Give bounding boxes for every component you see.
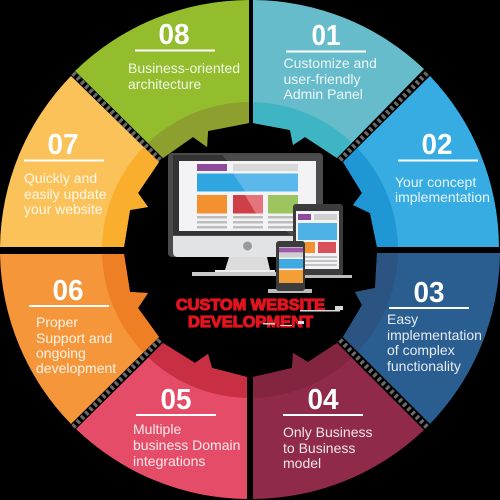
icon: desktop monitor — [168, 153, 323, 276]
title — [176, 297, 325, 331]
icon: responsive devices — [168, 153, 352, 293]
panel: segment 07: your website — [24, 201, 103, 217]
panel: segment 02 — [343, 76, 499, 247]
title: CUSTOM WEBSITE — [176, 297, 325, 314]
panel: segment 08: 08 — [158, 19, 190, 51]
panel: segment 05: integrations — [133, 453, 205, 469]
title highlight marks — [263, 306, 343, 326]
panel: segment 04: 04 — [308, 384, 338, 416]
panel: segment 01: 01 — [312, 20, 340, 52]
panel: segment 05: 05 — [160, 384, 192, 416]
panel: segment 02: implementation — [395, 189, 490, 205]
panel: segment 06 — [0, 254, 159, 424]
panel: segment 05 — [76, 343, 247, 499]
panel: segment 03: of complex — [387, 342, 455, 358]
panel: segment 05: business Domain — [133, 437, 240, 453]
panel: segment 07: 07 — [48, 129, 78, 161]
panel: segment 04: Only Business — [283, 424, 372, 440]
panel: segment 06: ongoing — [36, 345, 86, 361]
panel: segment 08 — [75, 0, 249, 158]
panel: segment 06: 06 — [52, 275, 84, 307]
panel: segment 06: Proper — [36, 314, 78, 330]
panel: segment 02: 02 — [422, 129, 452, 161]
panel: segment 06: development — [36, 360, 116, 376]
panel: segment 04: to Business — [283, 440, 355, 456]
panel: segment 06: Support and — [36, 330, 112, 346]
panel: segment 04: model — [283, 455, 321, 471]
panel: segment 01: Admin Panel — [284, 86, 363, 102]
panel: segment 04 — [253, 343, 424, 499]
panel: segment 08: architecture — [128, 76, 201, 92]
panel: segment 03 — [343, 253, 500, 424]
panel: segment 03: Easy — [387, 311, 418, 327]
panel: segment 02: Your concept — [395, 174, 476, 190]
panel: segment 07 — [0, 76, 159, 247]
panel: segment 01: Customize and — [284, 55, 377, 71]
icon: phone — [268, 241, 312, 293]
panel: segment 07: Quickly and — [24, 170, 97, 186]
panel: segment 08: Business-oriented — [128, 60, 240, 76]
panel: segment 03: functionality — [387, 358, 461, 374]
panel: segment 05: Multiple — [133, 421, 181, 437]
panel: segment 03: 03 — [414, 277, 444, 309]
title: DEVELOPMENT — [188, 314, 313, 331]
panel: segment 07: easily update — [24, 186, 107, 202]
panel: segment 03: implementation — [387, 327, 482, 343]
panel: segment 01: user-friendly — [284, 71, 361, 87]
icon: tablet — [293, 204, 352, 278]
diagonal separators between segments — [73, 73, 427, 427]
panel: segment 01 — [253, 0, 424, 158]
